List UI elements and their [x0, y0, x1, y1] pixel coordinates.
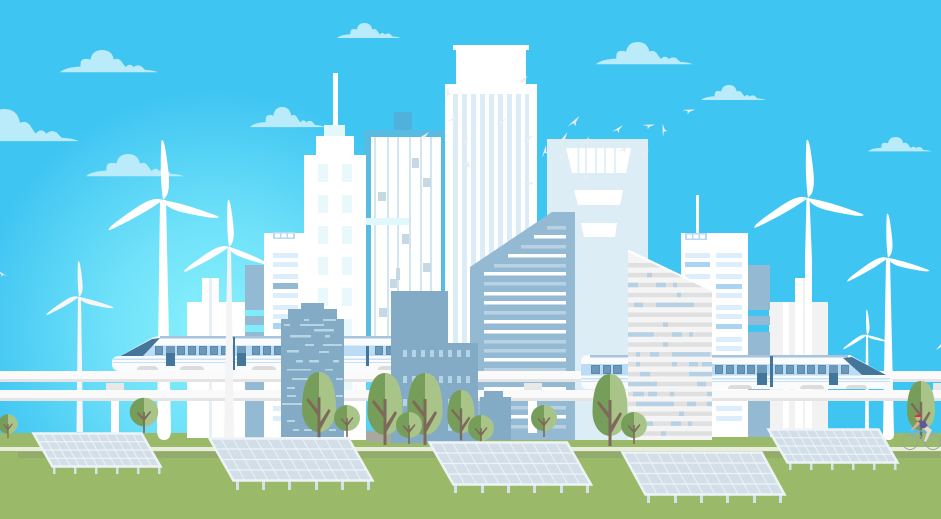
tree: tall beside striped building [592, 374, 628, 446]
solar panel 3 [430, 442, 591, 493]
steel blue block right [748, 265, 770, 437]
solar panel 5 [768, 430, 898, 470]
buildings: background towers [304, 45, 695, 440]
upper monorail track [0, 371, 941, 382]
buildings: right cluster [681, 195, 828, 437]
grey base [366, 431, 396, 442]
bird at left edge [0, 271, 7, 277]
steel blue block left [245, 265, 267, 438]
wind turbine small right [842, 310, 887, 433]
monorail tracks and pillars [0, 140, 941, 440]
white windowed building left [264, 232, 305, 438]
lower monorail track [0, 390, 941, 401]
tree: round near blue building [334, 405, 360, 437]
white stepped tower with spire [304, 73, 366, 440]
low grey building right [769, 260, 828, 437]
wind turbine mid left [182, 200, 269, 438]
large wind turbine left [105, 140, 219, 440]
blade at right edge [936, 344, 941, 350]
train on the left [112, 336, 392, 371]
tree: round in front of office [531, 405, 557, 437]
solar panel 4 [622, 452, 784, 503]
tree: round beside striped building [621, 412, 647, 444]
white windowed building right [681, 195, 748, 437]
blue block building [391, 291, 478, 443]
pillar caps [106, 383, 941, 390]
tree: tall near blue building [302, 372, 336, 442]
tree: tall far right [907, 381, 935, 439]
foreground buildings [281, 250, 712, 443]
low white building left [187, 278, 245, 438]
pillars [111, 401, 537, 433]
wind turbine far left [44, 261, 114, 432]
blue patterned building [281, 303, 344, 437]
cyclist [902, 415, 940, 450]
tree: tall centre right [408, 373, 442, 445]
striped glass tower [364, 112, 444, 360]
wind turbines back row [0, 214, 941, 440]
tree: round beside medium [468, 415, 494, 447]
clouds [0, 23, 932, 176]
small blue building [480, 391, 511, 440]
tower with vertical stripes [445, 45, 537, 345]
buildings: left cluster [187, 232, 305, 438]
angled blue office building [470, 212, 575, 440]
birds [418, 76, 695, 189]
large wind turbine right [751, 140, 864, 260]
tree: round centre [396, 412, 422, 444]
grey striped building [628, 250, 712, 440]
tree: small round far left [0, 414, 18, 438]
train on the right [581, 355, 893, 389]
road [0, 447, 941, 458]
solar panel 2 [210, 438, 372, 490]
tree: tall centre left [368, 373, 402, 445]
tree: round near pillar [130, 398, 158, 433]
sky bridge [366, 218, 409, 225]
wind turbine right [845, 214, 930, 440]
trees behind the road [0, 372, 935, 447]
pale blue tower with trapezoid windows [547, 139, 648, 440]
solar panel 1 [34, 434, 160, 474]
ground [0, 433, 941, 519]
tree: medium centre [447, 390, 475, 440]
